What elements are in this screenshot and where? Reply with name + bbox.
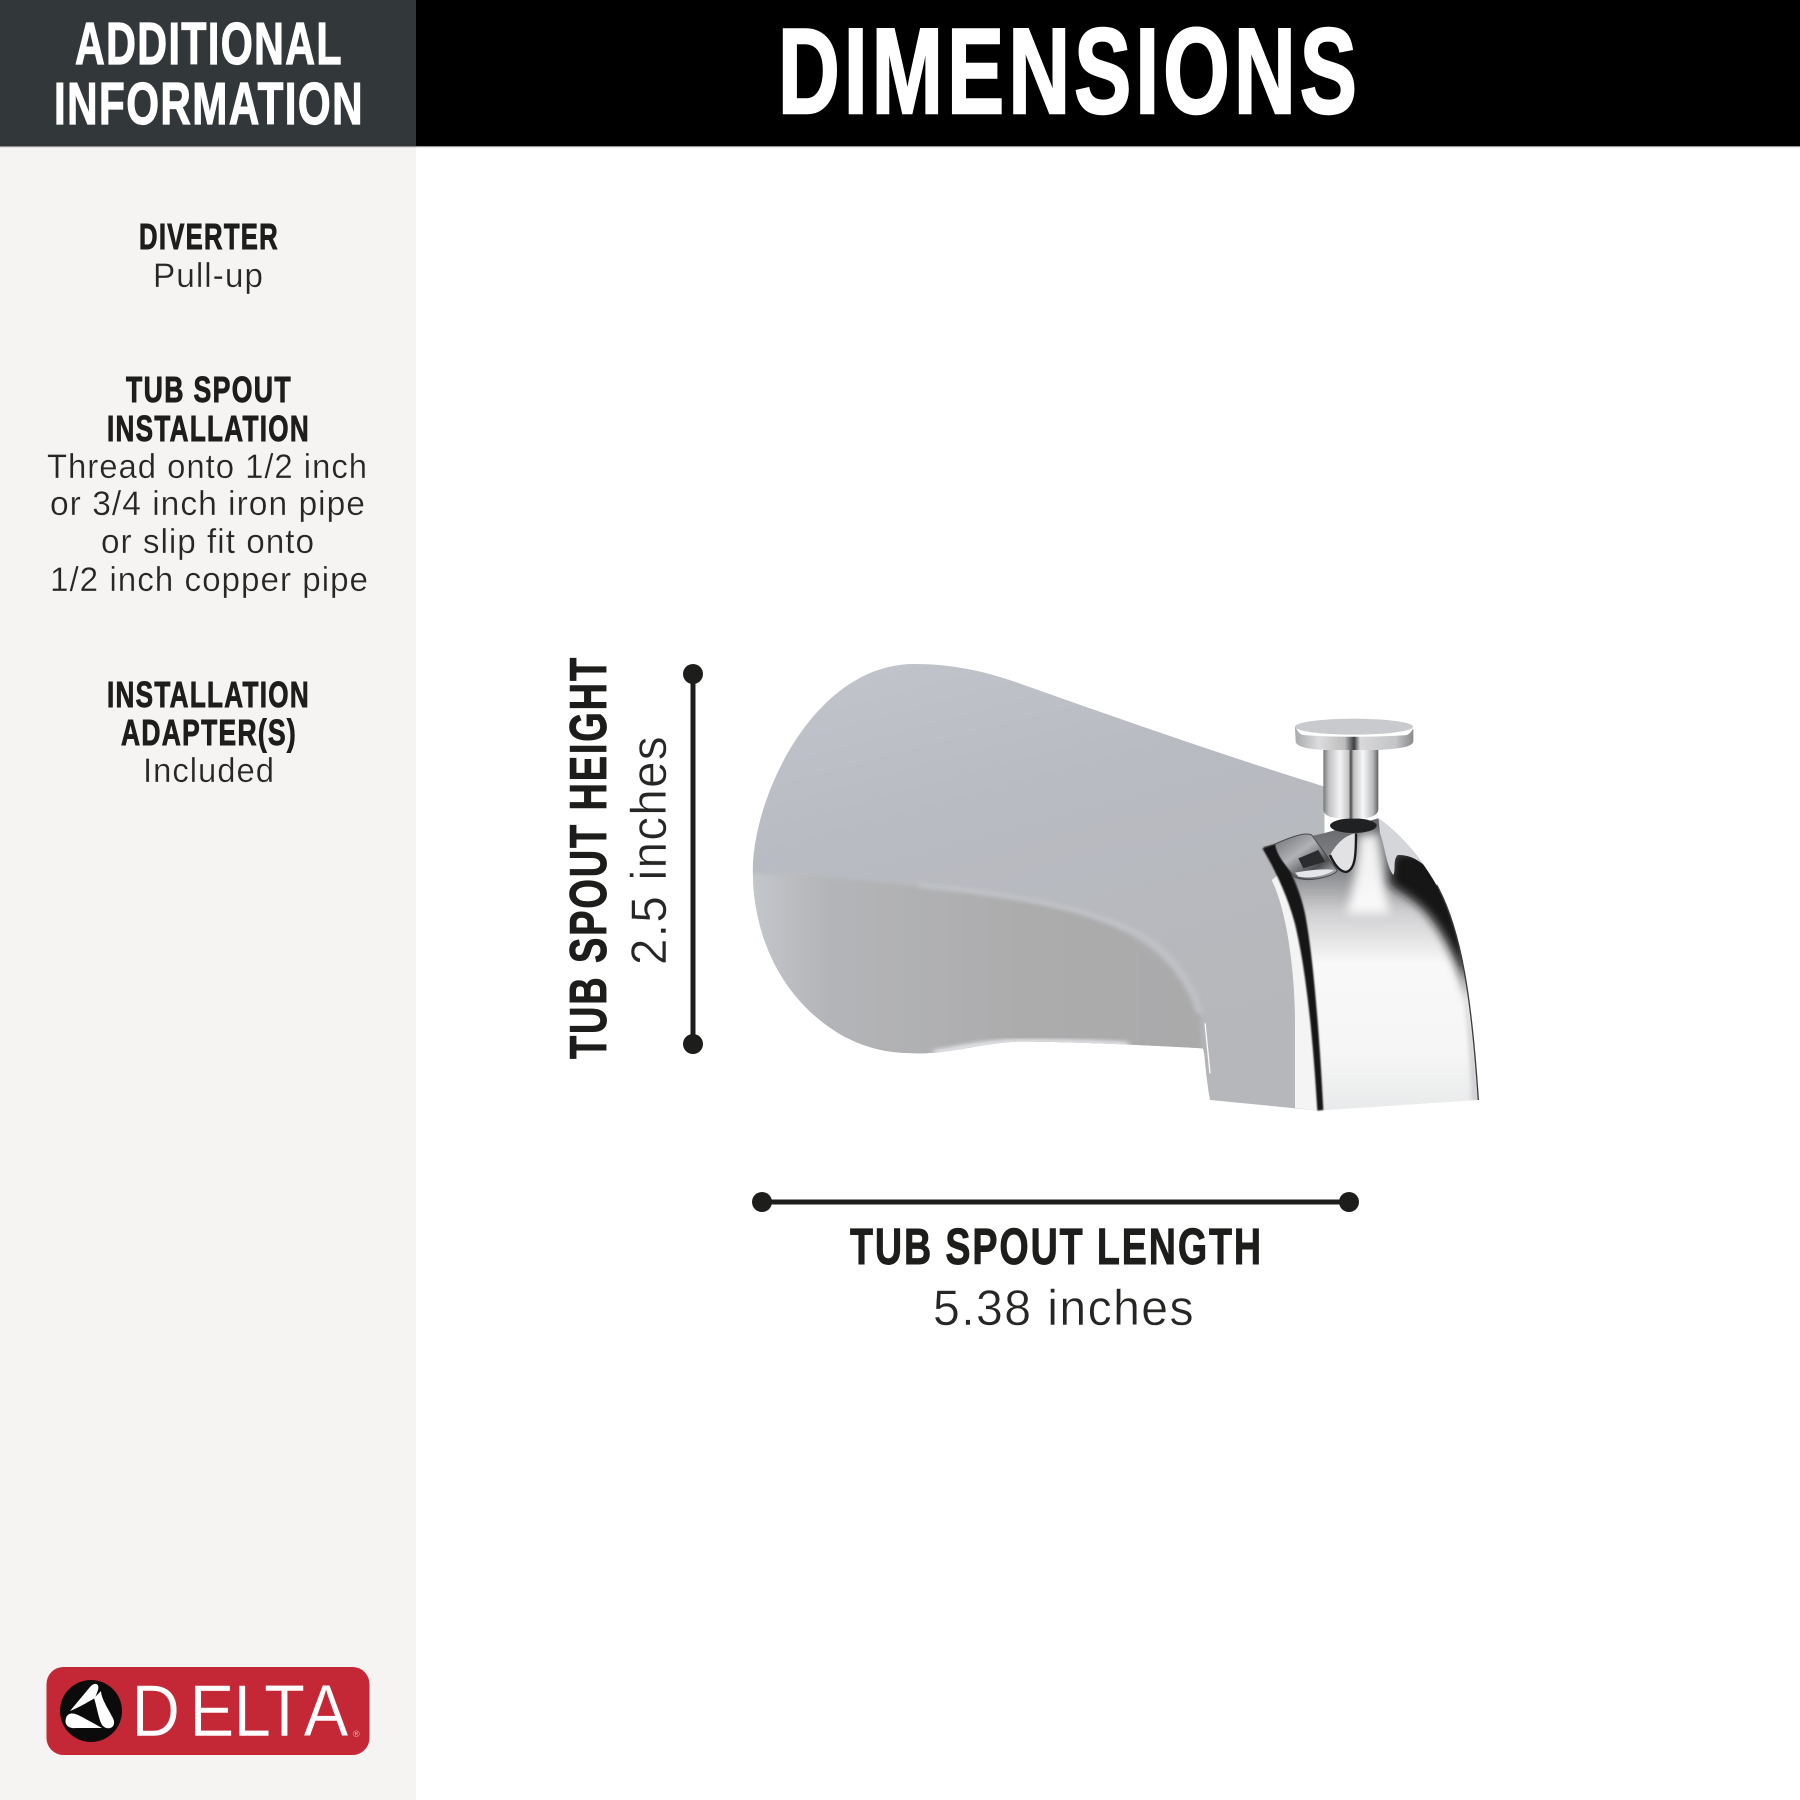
text block: tub spout installation: 1/2 inch copper pipe — [50, 561, 369, 599]
bottom edge highlight — [934, 1042, 1128, 1053]
right dark reflection — [1389, 852, 1469, 1000]
lower body shading — [740, 873, 1205, 1073]
neck highlight — [1347, 833, 1390, 913]
flip tab — [1275, 834, 1337, 880]
header: additional information — [0, 0, 416, 147]
illustration: chrome tub spout — [740, 664, 1487, 1113]
text block: installation adapters — [107, 674, 310, 790]
dimension: tub spout length: 5.38 inches — [933, 1280, 1195, 1336]
o-ring — [1330, 818, 1377, 833]
left white band — [1272, 873, 1320, 1111]
upper right surface — [1378, 818, 1424, 875]
neck arc — [1330, 833, 1356, 872]
plunger stem — [1323, 750, 1378, 819]
logo: delta: ® — [353, 1729, 360, 1739]
text block: diverter — [139, 216, 279, 295]
chrome front face — [1260, 813, 1487, 1113]
logo: delta — [46, 1667, 370, 1755]
right edge light band — [1462, 976, 1478, 1100]
right outline — [1437, 885, 1478, 1100]
text block: diverter: Pull-up — [153, 257, 264, 295]
ridge highlight — [919, 885, 1200, 1013]
dimension: tub spout length: TUB SPOUT LENGTH — [850, 1218, 1263, 1275]
text block: tub spout installation: or 3/4 inch iron pipe — [50, 485, 366, 523]
text block: installation adapters: INSTALLATION — [107, 674, 310, 715]
dimension: tub spout height — [560, 656, 703, 1059]
text block: diverter: DIVERTER — [139, 216, 279, 257]
dimension: tub spout height: TUB SPOUT HEIGHT — [560, 656, 618, 1059]
text block: tub spout installation: INSTALLATION — [107, 408, 310, 449]
plunger cap — [1295, 719, 1413, 750]
spout body — [740, 664, 1332, 1111]
black edge line — [1262, 844, 1323, 1111]
panel: additional information sidebar — [0, 146, 416, 1800]
logo: delta: DELTA — [132, 1670, 349, 1752]
text block: tub spout installation: or slip fit onto — [101, 523, 315, 561]
dimension: tub spout height: 2.5 inches — [621, 735, 677, 965]
text block: tub spout installation: TUB SPOUT — [126, 369, 292, 410]
text block: installation adapters: ADAPTER(S) — [121, 712, 297, 753]
chrome front and diverter — [1260, 719, 1487, 1113]
dimension: tub spout length — [752, 1192, 1359, 1336]
header: additional information: ADDITIONAL — [75, 11, 343, 77]
text block: tub spout installation: Thread onto 1/2 inch — [47, 448, 368, 486]
header: additional information: INFORMATION — [54, 71, 364, 137]
title: dimensions: DIMENSIONS — [778, 3, 1361, 139]
icon: delta triangle mark — [60, 1680, 122, 1742]
header: black dimensions banner — [416, 0, 1800, 147]
text block: tub spout installation — [47, 369, 369, 599]
text block: installation adapters: Included — [143, 752, 275, 790]
